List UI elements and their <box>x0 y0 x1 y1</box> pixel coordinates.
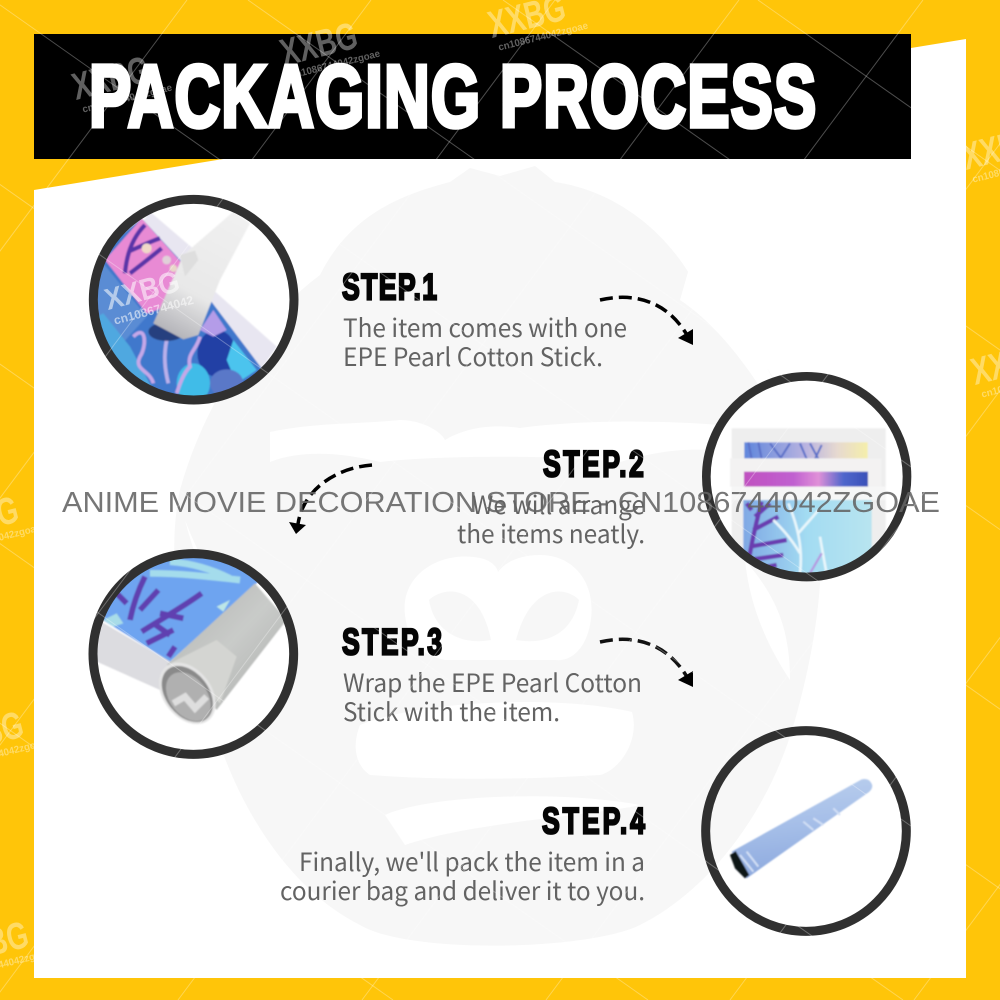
repeated logo watermarks: XXBG <box>276 15 362 75</box>
repeated logo watermarks: cn1086744042zgoae <box>497 20 590 54</box>
step 2 description <box>457 486 645 551</box>
step 3 description: Stick with the item. <box>343 693 560 729</box>
step 1 image: foam stick on poster <box>90 197 303 410</box>
arrow: step 1 to step 2 <box>600 297 693 345</box>
step 2 heading: STEP.2 <box>543 443 644 485</box>
background gorilla watermark <box>174 166 821 946</box>
step 3 description: Wrap the EPE Pearl Cotton <box>343 664 642 700</box>
arrow: step 3 to step 4 <box>600 639 693 687</box>
repeated logo watermarks: cn1086744042zgoae <box>289 48 382 82</box>
step 1 description: EPE Pearl Cotton Stick. <box>343 338 603 374</box>
step 1 heading: STEP.1 <box>342 266 437 308</box>
title: PACKAGING PROCESS <box>89 48 816 146</box>
step 2 description: We will arrange <box>472 486 645 522</box>
step 4 heading: STEP.4 <box>542 800 645 842</box>
step 3 heading: STEP.3 <box>342 621 442 663</box>
step 3 text <box>342 621 642 729</box>
repeated logo watermarks: XXBG <box>68 49 154 109</box>
step 2 description: the items neatly. <box>457 515 645 551</box>
step 4 image: courier bag <box>706 731 906 931</box>
step 3 description <box>343 664 642 729</box>
step 1 description: The item comes with one <box>343 309 627 345</box>
step 4 description <box>280 843 645 908</box>
title band <box>34 34 911 159</box>
step 4 description: Finally, we'll pack the item in a <box>299 843 645 879</box>
image watermark: XXBG <box>101 265 183 317</box>
step 3 image: wrapped roll <box>90 550 303 763</box>
repeated logo watermarks: cn1086744042zgoae <box>81 82 174 116</box>
step 4 text <box>280 800 645 908</box>
step 1 text <box>342 266 627 374</box>
step 1 description <box>343 309 627 374</box>
step 2 text <box>457 443 645 551</box>
arrow: step 2 to step 3 <box>289 465 372 534</box>
image watermark: cn1086744042 <box>112 293 195 328</box>
step 2 image: arranged items <box>703 373 910 580</box>
store name overlay: ANIME MOVIE DECORATION STORE - CN1086744042ZGOAE <box>62 487 940 519</box>
step 4 description: courier bag and deliver it to you. <box>280 872 645 908</box>
